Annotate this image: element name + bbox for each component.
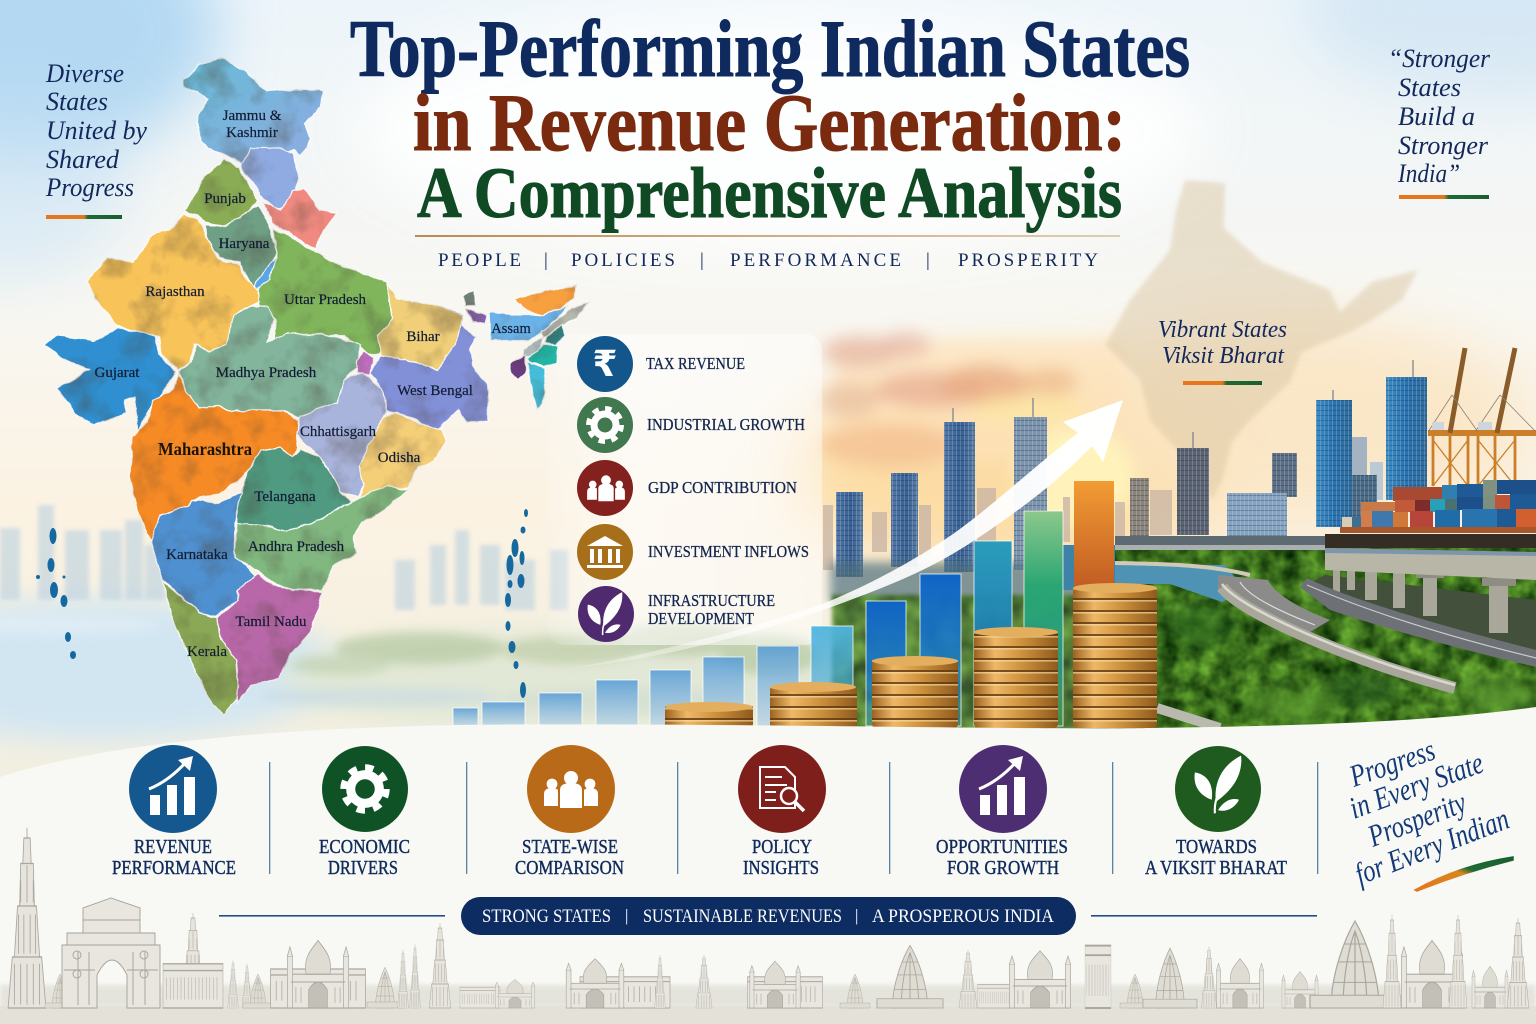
title: Top-Performing Indian States <box>350 3 1190 94</box>
handwritten note: in Every State <box>1344 745 1488 826</box>
left quote <box>45 59 147 219</box>
state: Jharkhand <box>357 351 375 375</box>
theme: state-wise comparison: STATE-WISE <box>522 836 618 858</box>
right quote: “Stronger <box>1388 44 1491 73</box>
banner: strong states: | <box>855 906 858 925</box>
driver: tax revenue: ₹ <box>592 344 618 385</box>
city skyline behind the chart <box>823 360 1427 577</box>
theme: towards a Viksit Bharat <box>1145 746 1287 879</box>
title <box>350 3 1190 233</box>
state: Kerala: Kerala <box>187 644 227 660</box>
right quote: Build a <box>1398 102 1475 131</box>
banner: strong states: A PROSPEROUS INDIA <box>872 907 1055 927</box>
white curved lower panel <box>0 707 1536 1024</box>
banner: strong states <box>219 897 1317 935</box>
monument: India Gate <box>62 898 160 1008</box>
state: Uttarakhand <box>262 189 337 249</box>
theme: opportunities for growth: FOR GROWTH <box>947 857 1059 879</box>
bar chart: rising revenue <box>453 481 1114 726</box>
states: north-east cluster: Assam <box>491 321 531 337</box>
left quote: Diverse <box>45 59 124 88</box>
theme: revenue performance <box>112 745 236 879</box>
coin stacks <box>665 583 1157 728</box>
state: Maharashtra: Maharashtra <box>158 439 252 459</box>
state: Jammu and Kashmir <box>183 59 323 163</box>
driver: industrial growth: INDUSTRIAL GROWTH <box>647 415 805 434</box>
state: West Bengal <box>369 325 489 432</box>
theme: policy insights <box>738 745 826 879</box>
driver: GDP contribution <box>577 460 797 516</box>
theme: towards a Viksit Bharat: TOWARDS <box>1176 836 1257 858</box>
handwritten note: Prosperity <box>1362 784 1471 854</box>
subtitle tagline: | <box>544 250 548 271</box>
callout: Vibrant States Viksit Bharat <box>1158 317 1287 385</box>
theme: state-wise comparison <box>515 745 624 879</box>
state: Haryana: Haryana <box>219 236 270 252</box>
right quote: India” <box>1397 159 1460 188</box>
state: Tamil Nadu <box>217 573 321 703</box>
right quote <box>1388 44 1491 199</box>
state: Jammu and Kashmir: Kashmir <box>226 125 278 141</box>
theme: state-wise comparison: COMPARISON <box>515 857 624 879</box>
state: Uttar Pradesh: Uttar Pradesh <box>284 292 367 308</box>
state: Jammu and Kashmir: Jammu & <box>223 108 282 124</box>
ground, water and tree canopy <box>830 536 1536 730</box>
state: Rajasthan <box>87 213 258 371</box>
driver: investment inflows: INVESTMENT INFLOWS <box>648 542 809 561</box>
title rule <box>415 235 1120 237</box>
callout: Vibrant States Viksit Bharat: Viksit Bharat <box>1162 343 1285 369</box>
state: Punjab <box>185 160 258 226</box>
subtitle tagline: PROSPERITY <box>958 250 1098 271</box>
state: Karnataka: Karnataka <box>166 547 228 563</box>
islands: Lakshadweep <box>36 528 76 659</box>
callout: Vibrant States Viksit Bharat: Vibrant States <box>1158 317 1287 343</box>
driver: infrastructure development: INFRASTRUCTURE <box>648 591 775 610</box>
driver: GDP contribution: GDP CONTRIBUTION <box>648 478 797 497</box>
state: Odisha: Odisha <box>378 450 421 466</box>
state: Himachal Pradesh <box>241 148 298 210</box>
theme: economic drivers: DRIVERS <box>328 857 398 879</box>
banner: strong states: SUSTAINABLE REVENUES <box>643 907 842 927</box>
title: in Revenue Generation: <box>413 77 1126 168</box>
arrow: upward growth trend <box>572 400 1123 668</box>
theme: policy insights: POLICY <box>752 836 812 858</box>
curving expressways <box>1115 563 1536 728</box>
subtitle tagline: PEOPLE <box>438 250 521 271</box>
icon row: themes <box>112 745 1287 879</box>
state: Andhra Pradesh <box>234 486 408 590</box>
subtitle tagline <box>438 250 1098 271</box>
state: Delhi region <box>248 258 276 288</box>
subtitle tagline: | <box>700 250 704 271</box>
driver: industrial growth <box>577 397 805 453</box>
theme: economic drivers: ECONOMIC <box>319 836 410 858</box>
handwritten note <box>1344 732 1514 892</box>
theme: opportunities for growth: OPPORTUNITIES <box>936 836 1068 858</box>
theme: policy insights: INSIGHTS <box>743 857 819 879</box>
theme: revenue performance: REVENUE <box>134 836 212 858</box>
subtitle tagline: PERFORMANCE <box>730 250 901 271</box>
subtitle tagline: | <box>926 250 930 271</box>
state: Chhattisgarh: Chhattisgarh <box>300 424 376 440</box>
state: Bihar: Bihar <box>406 329 440 345</box>
state: Madhya Pradesh <box>178 306 360 419</box>
subtitle tagline: POLICIES <box>571 250 675 271</box>
driver: tax revenue <box>577 336 745 392</box>
elevated highway with pillars <box>1307 534 1536 667</box>
state: Andhra Pradesh: Andhra Pradesh <box>248 539 345 555</box>
monument skyline line art <box>0 828 1536 1024</box>
state: Chhattisgarh <box>296 373 387 497</box>
right quote: Stronger <box>1398 131 1489 160</box>
shipping cranes <box>1428 348 1536 486</box>
state: West Bengal: West Bengal <box>397 383 473 399</box>
theme: economic drivers <box>319 746 410 879</box>
translucent panel: revenue drivers <box>548 334 822 645</box>
driver: infrastructure development: DEVELOPMENT <box>648 609 755 628</box>
driver: infrastructure development <box>578 586 775 642</box>
islands: Andaman and Nicobar <box>505 509 528 698</box>
state: Tamil Nadu: Tamil Nadu <box>235 614 307 630</box>
banner: strong states: | <box>625 906 628 925</box>
banner: strong states: STRONG STATES <box>482 907 611 927</box>
state: Karnataka <box>151 492 259 616</box>
driver: tax revenue: TAX REVENUE <box>646 354 745 373</box>
left quote: Shared <box>46 145 120 174</box>
theme: opportunities for growth <box>936 745 1068 879</box>
states: north-east cluster <box>464 284 589 410</box>
left quote: United by <box>46 116 147 145</box>
state: Telangana: Telangana <box>254 489 316 505</box>
left quote: Progress <box>45 173 134 202</box>
title: A Comprehensive Analysis <box>417 153 1122 233</box>
map of India by state <box>36 59 589 714</box>
theme: revenue performance: PERFORMANCE <box>112 857 236 879</box>
theme: towards a Viksit Bharat: A VIKSIT BHARAT <box>1145 857 1287 879</box>
left quote: States <box>46 87 108 116</box>
state: Odisha <box>358 412 446 499</box>
state: Punjab: Punjab <box>204 191 246 207</box>
state: Maharashtra <box>130 375 298 540</box>
sunset clouds <box>820 332 1135 528</box>
state: Haryana <box>205 206 276 286</box>
state: Gujarat: Gujarat <box>95 365 140 381</box>
right quote: States <box>1398 73 1461 102</box>
state: Bihar <box>378 284 462 369</box>
faint India map backdrop <box>1105 180 1418 500</box>
state: Uttar Pradesh <box>257 228 392 354</box>
state: Gujarat <box>44 328 175 432</box>
state: Madhya Pradesh: Madhya Pradesh <box>216 365 317 381</box>
handwritten note: Progress <box>1344 732 1439 794</box>
state: Rajasthan: Rajasthan <box>145 284 205 300</box>
state: Kerala <box>162 581 239 714</box>
state: Telangana <box>235 447 351 531</box>
driver: investment inflows <box>577 524 809 580</box>
stacked shipping containers <box>1340 480 1536 533</box>
misty city and river at left <box>0 505 860 740</box>
